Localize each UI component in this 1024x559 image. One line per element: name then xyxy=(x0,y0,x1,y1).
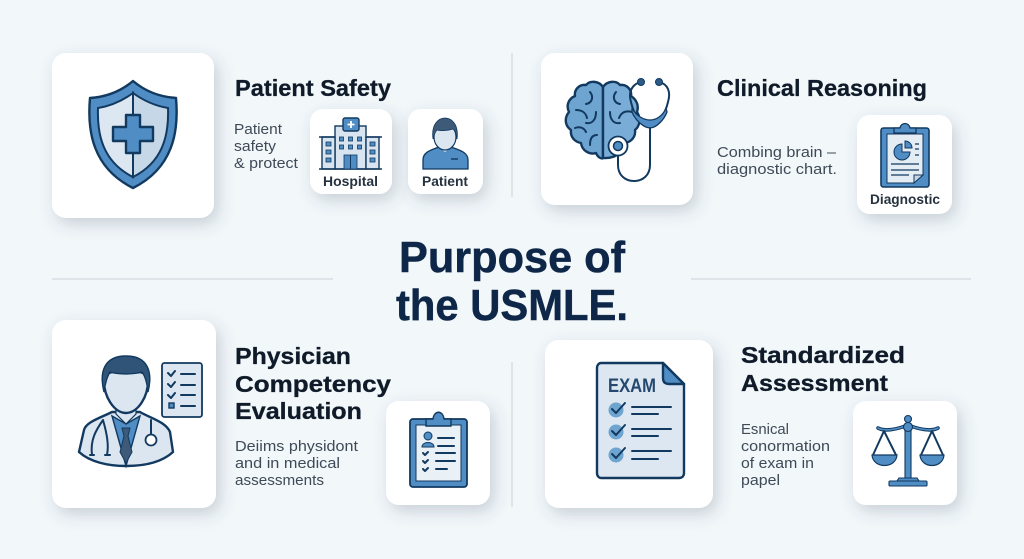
description: safety xyxy=(234,139,277,155)
title: the USMLE. xyxy=(396,281,628,330)
heading: Assessment xyxy=(741,370,888,396)
card: diagnostic xyxy=(857,115,952,214)
card: clipboard xyxy=(386,401,490,505)
icon: profile clipboard xyxy=(410,412,467,487)
label: Hospital xyxy=(323,174,378,189)
card: patient xyxy=(408,109,483,194)
description: diagnostic chart. xyxy=(717,162,837,178)
description: conormation xyxy=(741,439,830,455)
description: & protect xyxy=(234,156,298,172)
main card: exam xyxy=(545,340,713,508)
heading: Standardized xyxy=(741,342,905,368)
description: and in medical xyxy=(235,456,340,472)
heading: Patient Safety xyxy=(235,75,391,101)
icon: exam paper xyxy=(597,363,684,478)
description xyxy=(234,122,298,172)
title: Purpose of xyxy=(399,233,625,282)
description xyxy=(741,422,830,489)
title xyxy=(396,233,628,330)
description: of exam in xyxy=(741,456,814,472)
description: assessments xyxy=(235,473,324,489)
main card: patient safety xyxy=(52,53,214,218)
main card: clinical reasoning xyxy=(541,53,693,205)
icon: patient xyxy=(423,118,468,169)
panel: physician competency evaluation xyxy=(52,320,490,508)
description: Combing brain – xyxy=(717,145,837,161)
heading: Competency xyxy=(235,371,391,397)
icon: shield with cross xyxy=(89,81,177,188)
icon: exam paper: EXAM xyxy=(608,376,656,397)
heading xyxy=(235,343,391,424)
description: Esnical xyxy=(741,422,789,438)
panel: patient safety xyxy=(52,53,483,218)
icon: diagnostic clipboard xyxy=(881,124,929,187)
icon: brain and stethoscope xyxy=(566,78,669,181)
heading xyxy=(741,342,905,396)
card: scales xyxy=(853,401,957,505)
heading: Physician xyxy=(235,343,351,369)
panel: clinical reasoning xyxy=(541,53,952,214)
description: Deiims physidont xyxy=(235,439,358,455)
main card: physician xyxy=(52,320,216,508)
card: hospital xyxy=(310,109,392,194)
icon: balance scale xyxy=(872,416,944,486)
description xyxy=(235,439,358,489)
icon: hospital xyxy=(319,118,382,169)
label: Patient xyxy=(422,174,469,189)
description: papel xyxy=(741,473,780,489)
icon: doctor with checklist xyxy=(79,356,202,466)
description: Patient xyxy=(234,122,282,138)
heading: Clinical Reasoning xyxy=(717,75,927,101)
heading: Evaluation xyxy=(235,398,362,424)
description xyxy=(717,145,837,178)
label: Diagnostic xyxy=(870,192,940,207)
panel: standardized assessment xyxy=(545,340,957,508)
